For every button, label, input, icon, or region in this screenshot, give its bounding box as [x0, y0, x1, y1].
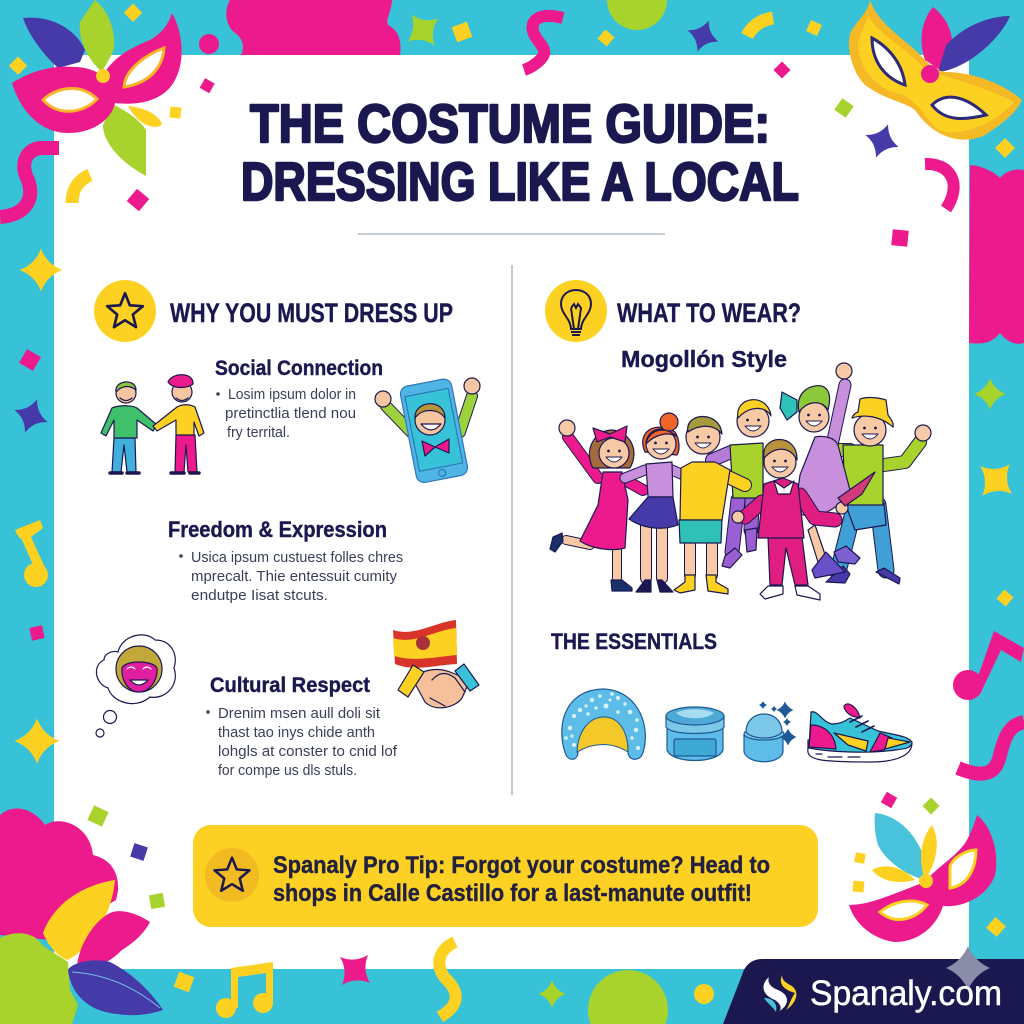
icon: pink mask bottom right [849, 813, 996, 942]
title: THE COSTUME GUIDE: [250, 94, 770, 154]
icon: phone with waving person [375, 378, 480, 484]
block: social connection [215, 357, 383, 441]
logo badge: Spanaly.com [723, 946, 1024, 1024]
heading: why you must dress up [94, 280, 453, 342]
icon: yellow mask top right [849, 0, 1022, 140]
block: freedom and expression: mprecalt. Thie entessuit cumity [191, 569, 398, 585]
block: cultural respect [206, 674, 398, 779]
title: DRESSING LIKE A LOCAL [241, 152, 799, 212]
illustration: group in colourful costumes [550, 363, 931, 600]
block: freedom and expression [168, 517, 403, 604]
person: blonde in green vest [712, 400, 771, 568]
callout: pro tip [193, 825, 818, 927]
block: social connection: Losim ipsum dolor in [228, 387, 356, 403]
block: social connection: Social Connection [215, 357, 383, 380]
top and side confetti [0, 0, 1024, 774]
block: cultural respect: lohgls at conster to cnid lof [218, 744, 398, 760]
subheading: mogollon style: Mogollón Style [621, 346, 787, 372]
block: freedom and expression: Usica ipsum custuest folles chres [191, 550, 403, 566]
heading: the essentials: THE ESSENTIALS [551, 629, 717, 654]
icon: sequin wig [562, 689, 645, 759]
icon: handshake [398, 664, 479, 708]
icon: spanish flag [393, 620, 457, 668]
icon: glitter jar [666, 707, 724, 760]
person: pink dress [550, 420, 643, 591]
heading: what to wear: WHAT TO WEAR? [617, 298, 801, 328]
block: social connection: pretinctlia tlend nou [225, 406, 356, 422]
icon: two people shaking hands [101, 375, 204, 473]
block: freedom and expression: Freedom & Expression [168, 517, 387, 542]
person: purple dress and green hair [780, 363, 852, 578]
logo badge: Spanaly.com: Spanaly.com [810, 974, 1002, 1013]
block: cultural respect: Drenim msen aull doli sit [218, 706, 380, 722]
callout: pro tip: Spanaly Pro Tip: Forgot your costume? Head to [273, 852, 770, 879]
icon: sneaker [808, 704, 912, 762]
white content panel [54, 55, 969, 969]
decoration: bottom left leaves and shapes [0, 805, 456, 1024]
person: yellow jacket and teal shorts [674, 416, 745, 594]
heading: why you must dress up: WHY YOU MUST DRESS UP [170, 298, 453, 328]
block: cultural respect: Cultural Respect [210, 674, 370, 697]
person: orange hair and purple skirt [625, 413, 690, 592]
callout: pro tip: shops in Calle Castillo for a last-manute outfit! [273, 880, 752, 907]
block: freedom and expression: endutpe Iisat stcuts. [191, 588, 328, 604]
person: green jacket and hat [826, 397, 931, 584]
heading: what to wear [545, 280, 801, 342]
icon: small glitter pot [744, 701, 796, 762]
icon: pink mask top left [12, 0, 182, 176]
block: cultural respect: for compe us dls stuls. [218, 763, 357, 779]
block: social connection: fry territal. [227, 425, 290, 441]
icon: thought bubble with face [96, 635, 175, 737]
person: pink suit centre [732, 440, 875, 600]
decoration: bottom shapes right [541, 792, 1006, 1024]
title [241, 94, 799, 212]
block: cultural respect: thast tao inys chide anth [218, 725, 375, 741]
